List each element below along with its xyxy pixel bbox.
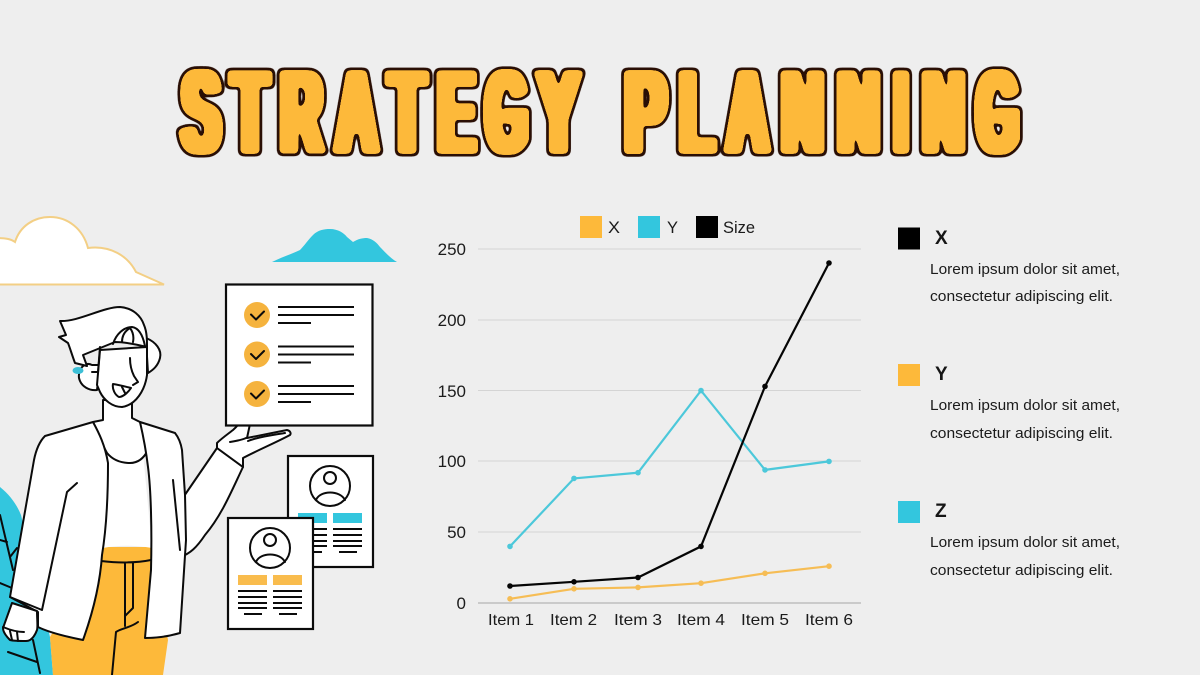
left jacket panel [10, 422, 108, 640]
jacket sleeve detail [10, 480, 180, 610]
earring [72, 367, 84, 374]
x axis labels: Item 3 [614, 612, 662, 629]
title: N [838, 47, 879, 177]
check item 1 [244, 302, 354, 328]
y axis labels: 150 [438, 382, 466, 401]
chart legend: X [608, 218, 620, 237]
title: P [625, 47, 666, 177]
chart legend [580, 216, 755, 238]
checklist card [226, 284, 372, 426]
series Size [507, 260, 832, 589]
title: N [923, 47, 964, 177]
fingers [230, 433, 285, 442]
shirt [103, 421, 152, 548]
title: T [232, 47, 268, 177]
title: A [727, 47, 768, 177]
legend block: Z: Z [935, 501, 947, 522]
icon: blue cloud [272, 229, 397, 262]
chart legend: Size [723, 218, 755, 237]
right arm [180, 448, 243, 557]
y axis labels: 0 [457, 594, 466, 613]
y axis labels [438, 240, 466, 613]
gridlines [478, 249, 861, 532]
neck [93, 400, 148, 463]
hair curl [92, 327, 145, 372]
line chart [438, 240, 861, 629]
x axis labels: Item 4 [677, 612, 725, 629]
y axis labels: 250 [438, 240, 466, 259]
title: I [895, 47, 907, 177]
legend block: Y: consectetur adipiscing elit. [930, 426, 1113, 442]
legend block: Z: consectetur adipiscing elit. [930, 563, 1113, 579]
legend block: X: Lorem ipsum dolor sit amet, [930, 262, 1120, 278]
hair [59, 307, 147, 366]
mouth [113, 384, 131, 397]
check item 3 [244, 381, 354, 407]
profile card: blue [288, 456, 373, 567]
title: E [438, 47, 475, 177]
text: G [977, 47, 1018, 177]
title: S [182, 47, 220, 177]
legend block: Z: Lorem ipsum dolor sit amet, [930, 535, 1120, 551]
illustration: blue leaf [0, 487, 53, 675]
title: G [486, 47, 527, 177]
hand [217, 413, 291, 467]
right jacket panel [140, 422, 186, 638]
series Y [507, 388, 832, 549]
profile card: orange [228, 518, 313, 629]
title: L [680, 47, 714, 177]
x axis labels: Item 2 [550, 612, 597, 629]
chart legend: Y [667, 218, 678, 237]
icon: white cloud [0, 217, 164, 284]
legend block: X: X [935, 228, 948, 249]
legend block: Y [898, 364, 1120, 442]
y axis labels: 50 [447, 523, 466, 542]
x axis labels: Item 1 [488, 612, 534, 629]
ear [79, 364, 100, 390]
legend block: Y: Y [935, 364, 948, 385]
fist [3, 603, 37, 641]
y axis labels: 100 [438, 452, 466, 471]
series X [507, 563, 832, 602]
legend block: Y: Lorem ipsum dolor sit amet, [930, 398, 1120, 414]
legend block: X [898, 228, 1120, 305]
x axis labels: Item 5 [741, 612, 789, 629]
legend block: X: consectetur adipiscing elit. [930, 289, 1113, 305]
trouser details [101, 560, 151, 675]
check item 2 [244, 342, 354, 368]
trousers [50, 547, 168, 675]
y axis labels: 200 [438, 311, 466, 330]
x axis labels [488, 612, 853, 629]
illustration: person [3, 307, 291, 675]
finger lines [3, 627, 24, 641]
title: T [389, 47, 425, 177]
title: Y [538, 47, 579, 177]
eye and nose [130, 358, 138, 385]
legend block: Z [898, 501, 1120, 579]
face [97, 347, 147, 407]
hair back [146, 338, 160, 373]
x axis labels: Item 6 [805, 612, 853, 629]
title [182, 47, 1018, 177]
title: N [782, 47, 823, 177]
title: R [281, 47, 322, 177]
title: A [336, 47, 377, 177]
